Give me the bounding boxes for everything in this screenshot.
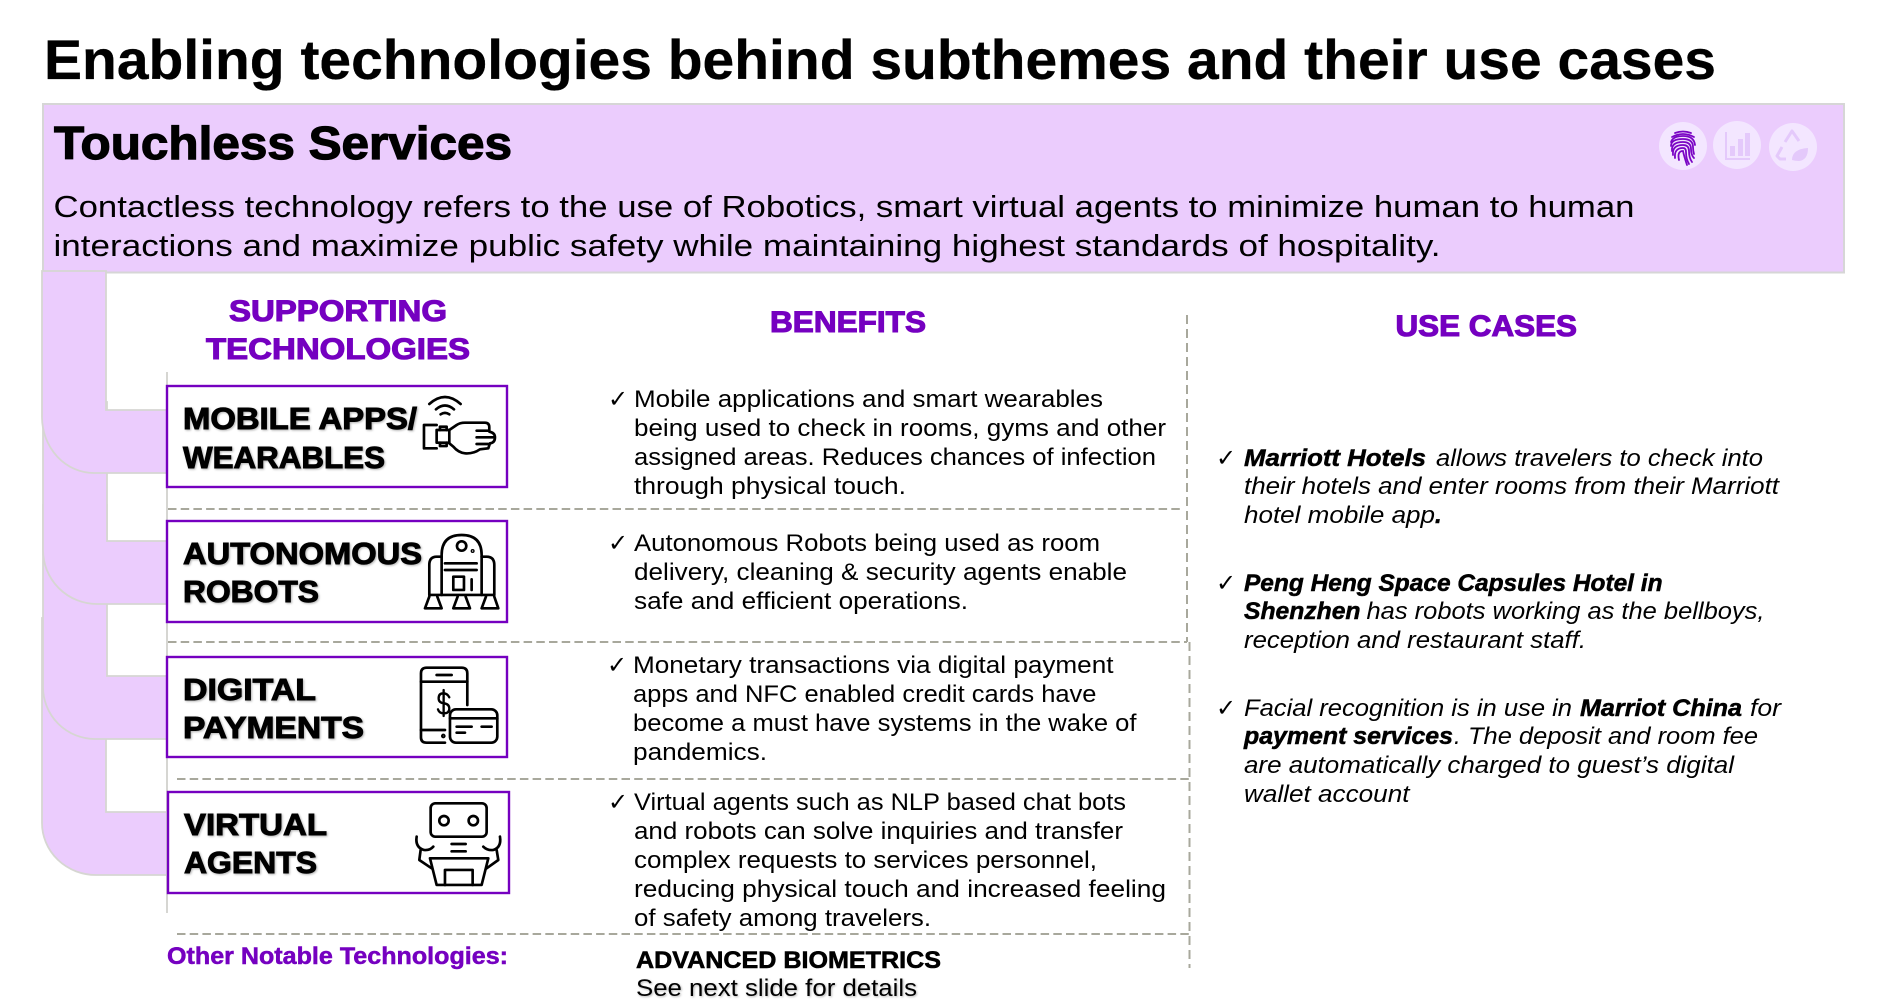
technology card: digital payments: PAYMENTS xyxy=(183,710,364,745)
text block: use case Marriot China xyxy=(1216,695,1782,808)
text block: use case Peng Heng Space Capsules: Shenzhen xyxy=(1244,598,1360,625)
panel: Touchless Services header xyxy=(43,104,1844,272)
text block: use case Marriott Hotels: their hotels and enter rooms from their Marriott xyxy=(1244,473,1780,500)
text block: description: interactions and maximize public safety while maintaining highest standards of hospitality. xyxy=(54,228,1440,263)
icon: droid robot xyxy=(425,535,498,608)
technology card: mobile apps / wearables: WEARABLES xyxy=(183,440,385,475)
text block: description: Contactless technology refers to the use of Robotics, smart virtual agents to minimize human to human xyxy=(54,189,1634,224)
text block: benefit mobile apps: ✓ xyxy=(608,386,628,413)
text block: benefit autonomous robots: delivery, cleaning & security agents enable xyxy=(634,559,1127,586)
text block: benefit mobile apps: assigned areas. Reduces chances of infection xyxy=(634,444,1156,471)
icon: bar chart (inactive) xyxy=(1713,121,1761,169)
technology card: autonomous robots xyxy=(167,521,507,622)
text block: benefit virtual agents: and robots can solve inquiries and transfer xyxy=(634,818,1123,845)
text block: benefit autonomous robots xyxy=(608,530,1127,615)
text block: use case Marriott Hotels xyxy=(1216,445,1780,529)
text block: benefit digital payments: ✓ xyxy=(607,652,627,679)
text block: use case Marriot China: payment services xyxy=(1243,723,1453,750)
technology card: digital payments xyxy=(167,657,507,757)
text block: use case Marriott Hotels: allows travelers to check into xyxy=(1436,445,1763,472)
text block: benefit mobile apps: through physical touch. xyxy=(634,473,906,500)
technology card: autonomous robots: AUTONOMOUS xyxy=(183,536,422,571)
text block: advanced biometrics note: See next slide for details xyxy=(636,975,917,1002)
text block: advanced biometrics note xyxy=(636,947,941,1002)
text block: use case Marriot China: . xyxy=(1454,723,1461,750)
text block: benefit digital payments xyxy=(607,652,1137,766)
text block: use case Marriot China: ✓ xyxy=(1216,695,1236,722)
text block: description xyxy=(54,189,1634,263)
heading: benefits: BENEFITS xyxy=(770,306,926,339)
heading: supporting technologies: TECHNOLOGIES xyxy=(206,333,470,366)
text block: use case Marriott Hotels: hotel mobile app xyxy=(1244,502,1435,529)
text block: use case Peng Heng Space Capsules: ✓ xyxy=(1216,570,1236,597)
heading: use cases: USE CASES xyxy=(1396,310,1577,343)
heading: supporting technologies xyxy=(206,295,470,366)
text block: use case Marriot China: Facial recognition is in use in xyxy=(1244,695,1572,722)
text block: benefit autonomous robots: safe and efficient operations. xyxy=(634,588,968,615)
text block: benefit digital payments: apps and NFC enabled credit cards have xyxy=(633,681,1096,708)
text block: use case Marriott Hotels: Marriott Hotels xyxy=(1244,445,1426,472)
text block: use case Marriott Hotels: . xyxy=(1435,502,1442,529)
heading: Touchless Services: Touchless Services xyxy=(54,117,512,169)
technology card: virtual agents: VIRTUAL xyxy=(184,807,327,842)
text block: use case Peng Heng Space Capsules: Peng Heng Space Capsules Hotel in xyxy=(1244,570,1662,597)
arrow: connector to mobile apps xyxy=(42,271,167,473)
technology card: mobile apps / wearables xyxy=(167,386,507,487)
text block: other notable technologies label: Other Notable Technologies: xyxy=(167,943,508,970)
technology card: autonomous robots: ROBOTS xyxy=(183,574,319,609)
text block: benefit virtual agents: ✓ xyxy=(608,789,628,816)
text block: use case Peng Heng Space Capsules: reception and restaurant staff. xyxy=(1244,627,1586,654)
text block: use case Marriot China: Marriot China xyxy=(1580,695,1742,722)
arrow: connector to autonomous robots xyxy=(43,402,167,604)
icon: smartwatch on wrist xyxy=(424,397,495,453)
heading: supporting technologies: SUPPORTING xyxy=(229,295,447,328)
text block: benefit autonomous robots: ✓ xyxy=(608,530,628,557)
text block: benefit digital payments: become a must have systems in the wake of xyxy=(633,710,1137,737)
icon: phone and credit card xyxy=(421,668,497,743)
icon: recycling leaf (inactive) xyxy=(1769,123,1817,171)
text block: benefit autonomous robots: Autonomous Robots being used as room xyxy=(634,530,1100,557)
icon: robot agent xyxy=(416,803,500,885)
text block: benefit virtual agents: reducing physical touch and increased feeling xyxy=(634,876,1166,903)
text block: benefit virtual agents: of safety among travelers. xyxy=(634,905,931,932)
text block: advanced biometrics note: ADVANCED BIOMETRICS xyxy=(636,947,941,974)
icon: fingerprint (active) xyxy=(1659,122,1707,170)
technology card: digital payments: DIGITAL xyxy=(183,672,316,707)
text block: benefit virtual agents xyxy=(608,789,1166,932)
arrow: connector to virtual agents xyxy=(42,618,167,875)
text block: use case Marriott Hotels: ✓ xyxy=(1216,445,1236,472)
arrow: connector to digital payments xyxy=(43,505,167,739)
text block: use case Marriot China: The deposit and room fee xyxy=(1468,723,1758,750)
text block: benefit mobile apps xyxy=(608,386,1166,500)
title: Enabling technologies behind subthemes and their use cases xyxy=(44,28,1716,91)
text block: use case Marriot China: wallet account xyxy=(1244,781,1411,808)
technology card: mobile apps / wearables: MOBILE APPS/ xyxy=(183,401,417,436)
text block: benefit digital payments: pandemics. xyxy=(633,739,767,766)
text block: use case Marriot China: are automatically charged to guest’s digital xyxy=(1244,752,1735,779)
technology card: virtual agents xyxy=(168,792,509,893)
vertical rule beside technologies xyxy=(166,372,168,913)
text block: benefit digital payments: Monetary transactions via digital payment xyxy=(633,652,1114,679)
text block: benefit mobile apps: Mobile applications and smart wearables xyxy=(634,386,1103,413)
text block: benefit mobile apps: being used to check in rooms, gyms and other xyxy=(634,415,1166,442)
text block: benefit virtual agents: complex requests to services personnel, xyxy=(634,847,1097,874)
text block: benefit virtual agents: Virtual agents such as NLP based chat bots xyxy=(634,789,1126,816)
text block: use case Peng Heng Space Capsules: has robots working as the bellboys, xyxy=(1366,598,1764,625)
text block: use case Peng Heng Space Capsules xyxy=(1216,570,1764,654)
technology card: virtual agents: AGENTS xyxy=(184,845,317,880)
text block: use case Marriot China: for xyxy=(1750,695,1782,722)
